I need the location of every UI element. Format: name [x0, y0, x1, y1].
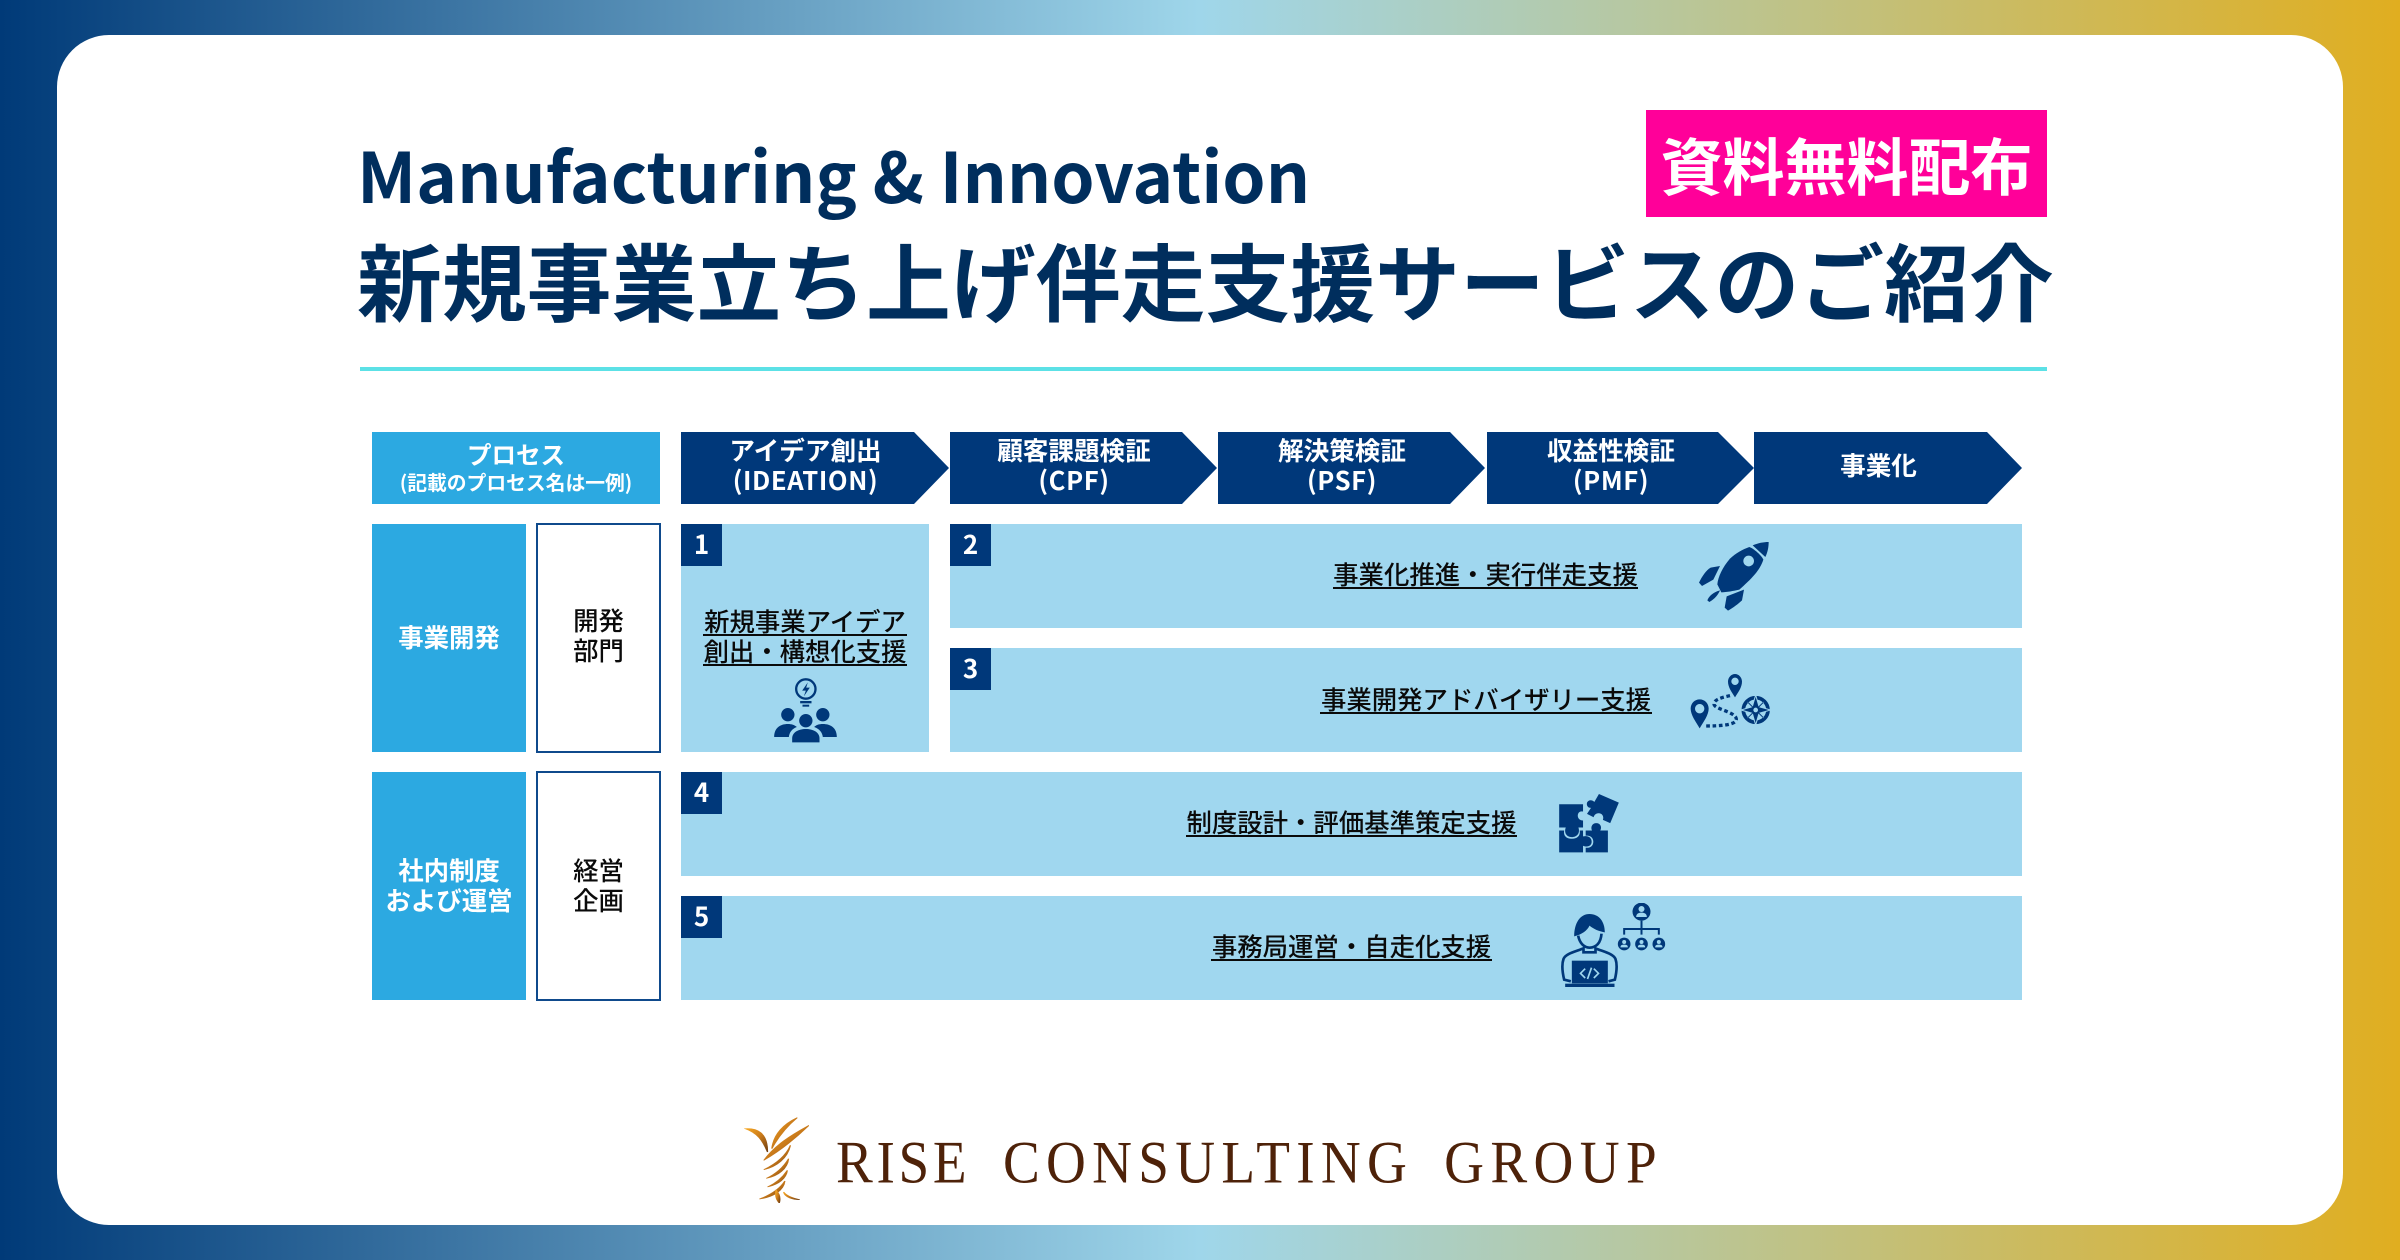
title: japanese: 新規事業立ち上げ伴走支援サービスのご紹介: [357, 218, 2054, 340]
process label note: (記載のプロセス名は一例): [400, 467, 632, 496]
chevron: PMF: [1487, 432, 1754, 504]
row label: business development: [372, 524, 526, 752]
panel 4 text: 制度設計・評価基準策定支援: [1186, 804, 1517, 840]
chevron: commercialization: 事業化: [1840, 446, 1917, 483]
chevron: PMF: (PMF): [1573, 461, 1649, 498]
panel 1: idea creation: [681, 524, 929, 752]
chevron: CPF: (CPF): [1038, 461, 1110, 498]
logo wordmark: RISE: [836, 1130, 967, 1196]
chevron: commercialization: [1754, 432, 2022, 504]
panel 3 text: 事業開発アドバイザリー支援: [1321, 681, 1651, 717]
row sublabel: development department: [536, 523, 661, 753]
chevron: CPF: 顧客課題検証: [997, 431, 1151, 468]
chevron: PMF: 収益性検証: [1547, 431, 1675, 468]
icon: lightbulb and people: [774, 678, 837, 742]
logo wordmark: CONSULTING: [1003, 1130, 1407, 1196]
row label: internal systems: [372, 772, 526, 1000]
number badge 4: [681, 772, 722, 814]
row label text: 社内制度: [398, 852, 500, 888]
badge: free materials: 資料無料配布: [1660, 118, 2032, 208]
row sublabel: corporate planning: [536, 771, 661, 1001]
number badge 5: 5: [694, 897, 709, 934]
logo wordmark: GROUP: [1444, 1130, 1657, 1196]
number badge 1: 1: [694, 525, 709, 562]
process header label: [372, 432, 660, 504]
sublabel text: 開発: [573, 602, 624, 638]
panel 2 text: 事業化推進・実行伴走支援: [1333, 556, 1638, 592]
title: english: Manufacturing & Innovation: [357, 123, 1310, 223]
logo wordmark: [836, 1130, 1657, 1196]
sublabel text: [573, 602, 624, 668]
sublabel text: 企画: [573, 882, 624, 918]
chevron: ideation: アイデア創出: [729, 431, 882, 468]
number badge 2: [950, 524, 991, 566]
icon: puzzle: [1559, 794, 1619, 852]
title divider: [360, 367, 2047, 371]
process label main: プロセス: [467, 437, 565, 472]
row label text: [386, 852, 512, 918]
panel 1 text line 2: 創出・構想化支援: [703, 633, 907, 669]
number badge 3: 3: [963, 649, 978, 686]
chevron: CPF: [950, 432, 1217, 504]
chevron: PSF: 解決策検証: [1278, 431, 1406, 468]
number badge 3: [950, 648, 991, 690]
number badge 4: 4: [694, 773, 709, 810]
number badge 5: [681, 896, 722, 938]
icon: map route and compass: [1690, 674, 1770, 728]
row label text: および運営: [386, 882, 512, 918]
panel 4: system design support: [681, 772, 2022, 876]
sublabel text: 経営: [573, 852, 624, 888]
chevron: PSF: (PSF): [1307, 461, 1377, 498]
sublabel text: 部門: [573, 632, 624, 668]
panel 1 text line 1: 新規事業アイデア: [704, 603, 906, 639]
panel 2: commercialization support: [950, 524, 2022, 628]
panel 5: secretariat support: [681, 896, 2022, 1000]
row label: business development: 事業開発: [398, 619, 500, 655]
panel 5 text: 事務局運営・自走化支援: [1212, 928, 1491, 964]
chevron: ideation: (IDEATION): [733, 461, 878, 498]
chevron: PSF: [1218, 432, 1485, 504]
icon: rocket: [1699, 542, 1769, 611]
icon: operator with laptop and org chart: [1561, 903, 1666, 987]
chevron: ideation: [681, 432, 949, 504]
panel 3: advisory support: [950, 648, 2022, 752]
number badge 1: [681, 524, 722, 566]
number badge 2: 2: [963, 525, 978, 562]
sublabel text: [573, 852, 624, 918]
logo mark: [744, 1117, 809, 1203]
